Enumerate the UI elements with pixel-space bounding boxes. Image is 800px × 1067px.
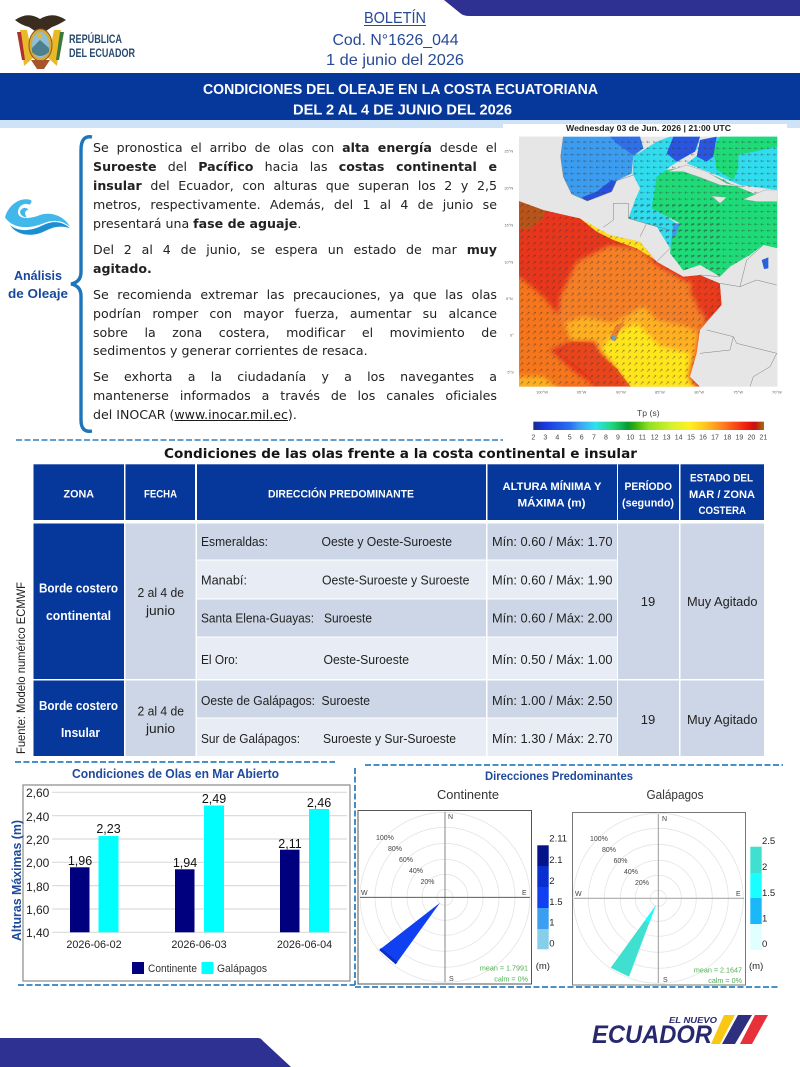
map axis labels — [504, 149, 782, 395]
label: Análisis de Oleaje: Análisis — [14, 269, 62, 283]
direction rows: Suroeste — [322, 693, 370, 708]
wind rose: Continente: 100% — [376, 835, 394, 842]
direction rows: Suroeste — [324, 611, 372, 626]
analysis text: podrían romper con mayor fuerza, aumentar su alcance — [93, 306, 497, 321]
map axis labels: 20°N — [504, 185, 513, 190]
map colorbar: 13 — [663, 434, 671, 441]
map colorbar: 17 — [711, 434, 719, 441]
logo text — [69, 33, 136, 60]
legend: Galápagos — [217, 963, 267, 975]
y axis labels: 1,80 — [26, 880, 50, 894]
map axis labels: 90°W — [616, 390, 626, 395]
direction rows — [197, 524, 486, 756]
wind rose: Continente: 2.11 — [549, 834, 567, 845]
map colorbar: 9 — [616, 434, 620, 441]
map axis labels: 15°N — [504, 222, 513, 227]
source note: Fuente: Modelo numérico ECMWF — [14, 582, 28, 754]
wind rose: Galápagos: E — [736, 891, 741, 898]
wind rose: Continente: Continente — [437, 787, 499, 802]
direction rows: Oeste y Oeste-Suroeste — [322, 534, 452, 549]
map colorbar: 4 — [555, 434, 559, 441]
date column — [126, 524, 196, 756]
analysis text: mantenerse informados a través de los canales oficiales — [93, 388, 497, 403]
analysis text — [93, 140, 497, 422]
wind rose: Continente: E — [522, 890, 527, 897]
period column: 19 — [641, 594, 655, 609]
wind rose: Galápagos: calm = 0% — [708, 976, 743, 985]
colorbar — [750, 847, 762, 873]
analysis text: Suroeste del Pacífico hacia las costas continental e — [93, 159, 497, 174]
map colorbar: 19 — [735, 434, 743, 441]
Pacific sea — [519, 201, 722, 387]
icon: coat of arms — [15, 15, 66, 69]
table header: MÁXIMA (m) — [518, 497, 586, 510]
height rows: Mín: 0.60 / Máx: 1.90 — [492, 572, 612, 587]
map axis labels: 5°S — [507, 369, 514, 374]
height rows: Mín: 1.00 / Máx: 2.50 — [492, 693, 612, 708]
height rows: Mín: 0.60 / Máx: 2.00 — [492, 611, 612, 626]
top right decorative tab — [444, 0, 800, 16]
y axis labels: 2,60 — [26, 786, 50, 800]
wind rose: Continente: S — [449, 976, 454, 983]
wind rose: Galápagos: 80% — [602, 847, 616, 854]
zone column — [34, 524, 124, 756]
table header: PERÍODO — [624, 480, 672, 493]
height rows: Mín: 1.30 / Máx: 2.70 — [492, 731, 612, 746]
colorbar — [537, 845, 549, 866]
wind rose: Galápagos: 2.5 — [762, 836, 775, 847]
wind rose: Continente: 1 — [549, 918, 555, 929]
title band — [0, 73, 800, 128]
y axis labels: 1,60 — [26, 903, 50, 917]
table — [34, 464, 764, 756]
bulletin heading — [326, 8, 464, 69]
sea state column: Muy Agitado — [687, 594, 758, 609]
direction rows: Sur de Galápagos: — [201, 731, 300, 746]
map colorbar: 18 — [723, 434, 731, 441]
analysis text: presentará una fase de aguaje. — [93, 216, 301, 231]
bar chart panel — [10, 767, 350, 981]
y axis labels: 2,20 — [26, 833, 50, 847]
chart title: Condiciones de Olas en Mar Abierto — [72, 767, 279, 781]
wind rose: Continente: 60% — [399, 857, 413, 864]
table header — [34, 464, 764, 520]
wind rose: Galápagos: S — [663, 977, 668, 984]
map axis labels: 100°W — [536, 390, 548, 395]
wind rose: Continente: 1.5 — [549, 897, 563, 908]
label: Análisis de Oleaje: de Oleaje — [8, 287, 68, 301]
bar values — [68, 792, 331, 870]
analysis text: Se exhorta a la ciudadanía y a los navegantes a — [93, 369, 497, 384]
direction rows: Oeste-Suroeste y Suroeste — [322, 572, 470, 587]
direction rows: Suroeste y Sur-Suroeste — [323, 731, 456, 746]
logo: El Nuevo Ecuador: ECUADOR — [592, 1021, 712, 1049]
logo text: REPÚBLICA — [69, 33, 122, 46]
wind rose: Galápagos: 60% — [614, 858, 628, 865]
wind rose: Continente: 20% — [420, 879, 435, 886]
date column: junio — [145, 603, 175, 618]
legend — [132, 962, 267, 975]
map colorbar: 11 — [639, 434, 646, 441]
map — [504, 137, 782, 441]
analysis text: del INOCAR (www.inocar.mil.ec). — [93, 407, 297, 422]
y axis labels: 2,00 — [26, 856, 50, 870]
wind rose: Continente: 80% — [388, 846, 402, 853]
analysis text: insular del Ecuador, con alturas que superan los 2 y 2,5 — [93, 178, 497, 193]
bar values: 2,11 — [278, 837, 302, 851]
map axis labels: 5°N — [506, 296, 513, 301]
wind rose: Continente — [358, 787, 567, 984]
title band: CONDICIONES DEL OLEAJE EN LA COSTA ECUATORIANA — [203, 82, 599, 98]
analysis text: Se recomienda extremar las precauciones, ya que las olas — [93, 287, 497, 302]
wind rose: Continente: W — [361, 890, 368, 897]
map colorbar: 6 — [580, 434, 584, 441]
bulletin heading: 1 de junio del 2026 — [326, 52, 464, 69]
wind rose: Galápagos: Galápagos — [646, 787, 704, 802]
table header: COSTERA — [698, 505, 746, 517]
table header: ALTURA MÍNIMA Y — [502, 480, 602, 493]
map colorbar: 10 — [626, 434, 634, 441]
wind rose: Continente: 2.1 — [549, 855, 563, 866]
table title: Condiciones de las olas frente a la costa continental e insular — [164, 447, 638, 462]
table header: FECHA — [144, 489, 177, 501]
height rows: Mín: 0.60 / Máx: 1.70 — [492, 534, 612, 549]
footer tab — [0, 1038, 291, 1067]
label: Análisis de Oleaje — [8, 269, 68, 301]
logo: El Nuevo Ecuador: EL NUEVO — [669, 1016, 718, 1025]
map colorbar: 5 — [568, 434, 572, 441]
map axis labels: 70°W — [772, 390, 782, 395]
bar values: 2,49 — [202, 792, 226, 806]
wedge — [611, 905, 656, 977]
table header: ZONA — [64, 489, 94, 501]
wind rose: Continente: 2 — [549, 876, 555, 887]
y axis title: Alturas Máximas (m) — [10, 820, 24, 941]
map colorbar: 21 — [759, 434, 767, 441]
y axis labels — [26, 786, 50, 940]
direction rows: Manabí: — [201, 572, 247, 587]
date column: junio — [145, 721, 175, 736]
wave map panel — [503, 124, 787, 442]
wind rose: Galápagos: 40% — [624, 869, 638, 876]
map colorbar: 15 — [687, 434, 695, 441]
bulletin heading: Cod. N°1626_044 — [332, 32, 459, 49]
map colorbar: 3 — [543, 434, 547, 441]
wind rose: Galápagos: 0 — [762, 939, 767, 950]
x axis labels: 2026-06-03 — [171, 939, 227, 951]
map axis labels: 85°W — [655, 390, 665, 395]
legend: Continente — [148, 963, 197, 975]
zone column: Borde costero — [39, 699, 118, 713]
wind rose: Continente: mean = 1.7991 — [480, 964, 528, 973]
wind rose: Galápagos — [572, 787, 775, 985]
map axis labels: 10°N — [504, 259, 513, 264]
sea state column: Muy Agitado — [687, 712, 758, 727]
wind rose: Galápagos: N — [662, 816, 667, 823]
wind rose: Galápagos: (m) — [749, 961, 763, 972]
zone column: Borde costero — [39, 582, 118, 596]
date column: 2 al 4 de — [138, 703, 184, 718]
wind rose: Galápagos: 1 — [762, 914, 767, 925]
bars Galápagos — [98, 806, 329, 932]
map title: Wednesday 03 de Jun. 2026 | 21:00 UTC — [566, 124, 731, 133]
logo: El Nuevo Ecuador — [592, 1015, 768, 1049]
map axis labels: 80°W — [694, 390, 704, 395]
zone column: continental — [46, 609, 111, 623]
map colorbar: 2 — [531, 434, 535, 441]
analysis text: sedimentos y generar corrientes de resaca. — [93, 343, 368, 358]
wind rose: Continente: N — [448, 814, 453, 821]
direction rows: Esmeraldas: — [201, 534, 268, 549]
sea state column — [680, 524, 764, 756]
wind rose: Galápagos: 1.5 — [762, 888, 775, 899]
map colorbar: 16 — [699, 434, 707, 441]
analysis text: agitado. — [93, 261, 152, 276]
period column: 19 — [641, 712, 655, 727]
wind rose: Galápagos: 2 — [762, 862, 767, 873]
y axis grid — [52, 792, 347, 932]
analysis text: sobre la zona costera, modificar el movimiento de — [93, 325, 497, 340]
title band: DEL 2 AL 4 DE JUNIO DEL 2026 — [293, 102, 512, 118]
map colorbar: 8 — [604, 434, 608, 441]
wind rose: Galápagos: mean = 2.1647 — [694, 966, 742, 975]
table header: DIRECCIÓN PREDOMINANTE — [268, 488, 414, 501]
map colorbar: 20 — [747, 434, 755, 441]
icon: wave — [5, 199, 70, 235]
divider — [16, 439, 503, 441]
map axis labels: 95°W — [577, 390, 587, 395]
dividers around lower panels — [15, 762, 783, 987]
wind rose: Galápagos: 100% — [590, 836, 608, 843]
map colorbar: 12 — [651, 434, 659, 441]
bar values: 2,46 — [307, 796, 331, 810]
wind rose: Continente: calm = 0% — [494, 975, 529, 984]
map colorbar: 14 — [675, 434, 683, 441]
wind rose: Galápagos: 20% — [635, 880, 649, 887]
analysis text: Se pronostica el arribo de olas con alta energía desde el — [93, 140, 497, 155]
y axis labels: 1,40 — [26, 926, 50, 940]
bar values: 1,94 — [173, 856, 197, 870]
table header: MAR / ZONA — [689, 489, 755, 501]
height rows — [488, 524, 617, 756]
zone column: Insular — [61, 726, 100, 740]
analysis text: Del 2 al 4 de junio, se espera un estado de mar muy — [93, 242, 497, 257]
wedge — [379, 903, 440, 964]
map axis labels: 25°N — [504, 149, 513, 154]
y axis labels: 2,40 — [26, 810, 50, 824]
bar values: 2,23 — [96, 822, 121, 836]
analysis text: metros, respectivamente. Además, del 1 al 4 de junio se — [93, 197, 497, 212]
direction rows: Oeste-Suroeste — [324, 652, 409, 667]
table header: ESTADO DEL — [690, 473, 753, 485]
map axis labels: 75°W — [733, 390, 743, 395]
wind rose: Continente: 0 — [549, 939, 555, 950]
wind rose: Galápagos: W — [575, 891, 582, 898]
land borders — [561, 137, 777, 387]
brace — [71, 137, 92, 431]
directions heading: Direcciones Predominantes — [485, 771, 633, 783]
map colorbar — [531, 408, 767, 441]
wind rose: Continente: 40% — [409, 868, 423, 875]
direction rows: El Oro: — [201, 652, 238, 667]
period column — [618, 524, 679, 756]
x axis labels: 2026-06-04 — [277, 939, 332, 951]
x axis labels — [66, 939, 332, 951]
height rows: Mín: 0.50 / Máx: 1.00 — [492, 652, 612, 667]
map axis labels: 0° — [510, 333, 514, 338]
direction rows: Oeste de Galápagos: — [201, 693, 315, 708]
bulletin heading: BOLETÍN — [364, 8, 426, 27]
map colorbar: 7 — [592, 434, 596, 441]
logo: República del Ecuador — [15, 15, 136, 69]
wind rose: Continente: (m) — [536, 961, 550, 972]
land over arrows — [519, 137, 777, 387]
date column: 2 al 4 de — [138, 585, 184, 600]
direction rows: Santa Elena-Guayas: — [201, 611, 314, 626]
map colorbar: Tp (s) — [637, 408, 660, 418]
bar values: 1,96 — [68, 854, 92, 868]
table header: (segundo) — [622, 498, 674, 510]
x axis labels: 2026-06-02 — [66, 939, 122, 951]
logo text: DEL ECUADOR — [69, 48, 136, 60]
bars Continente — [70, 850, 300, 932]
